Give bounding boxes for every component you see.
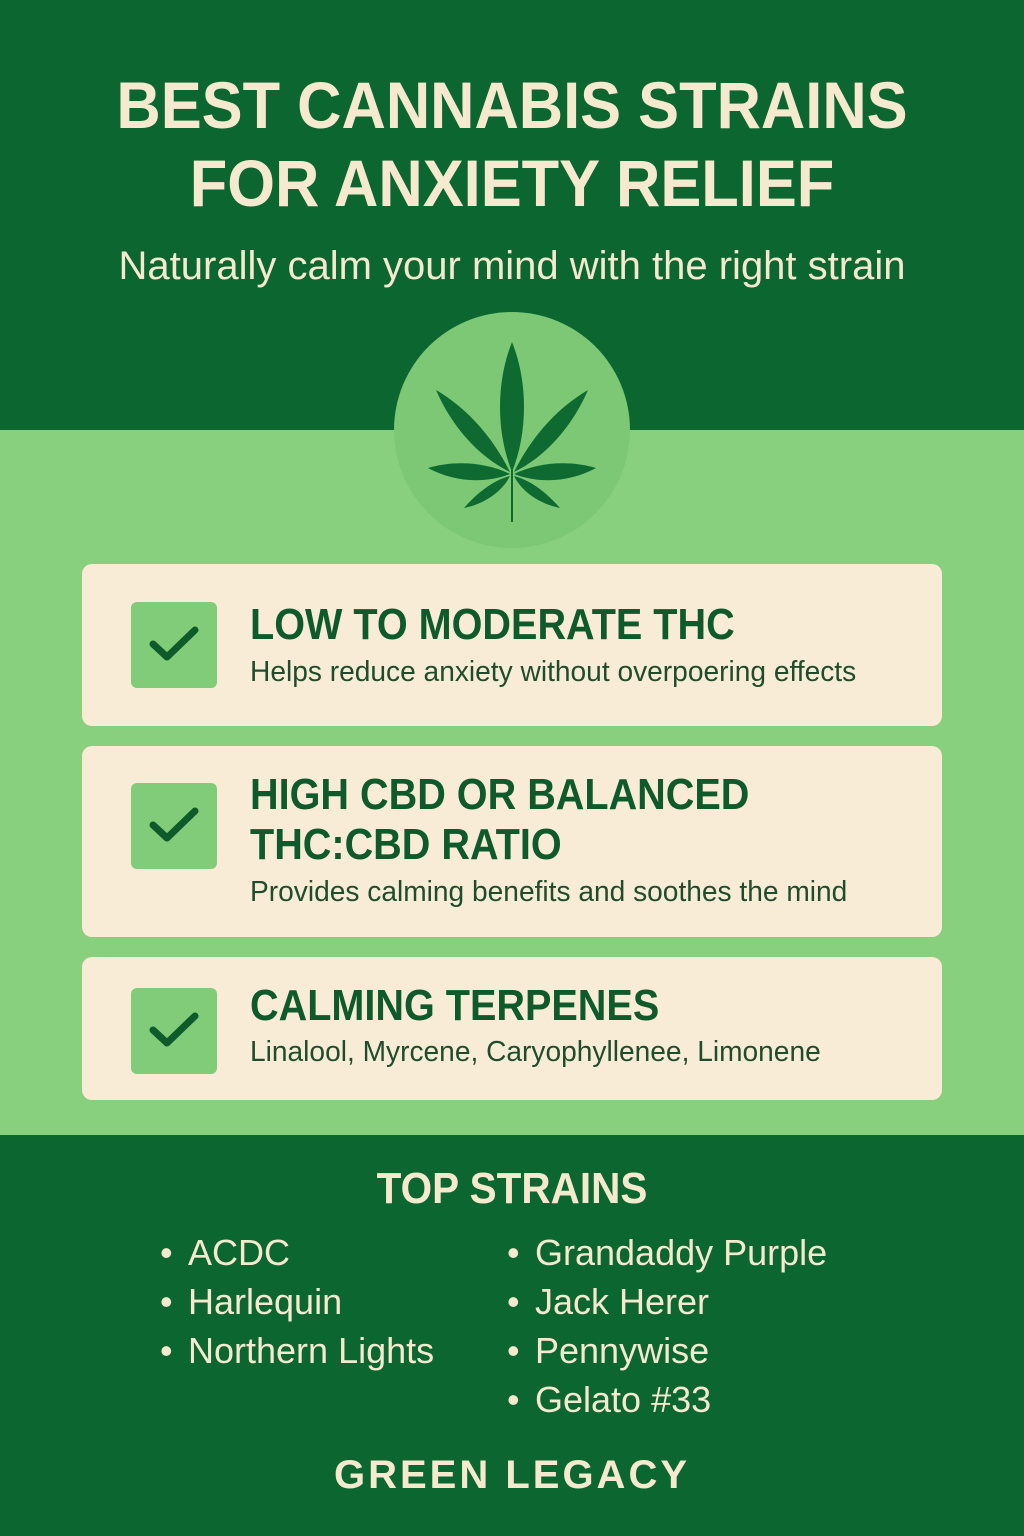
list: left column: • xyxy=(160,1330,173,1371)
description: Linalool, Myrcene, Caryophyllenee, Limonene xyxy=(250,1036,821,1068)
heading: LOW TO MODERATE THC xyxy=(250,600,735,649)
list: right column: • xyxy=(507,1379,520,1420)
list: right column: • xyxy=(507,1330,520,1371)
heading: HIGH CBD OR BALANCED xyxy=(250,770,749,819)
light green band xyxy=(0,430,1024,1135)
list: right column: Gelato #33 xyxy=(535,1379,711,1420)
card: low to moderate THC xyxy=(82,564,942,726)
description: Provides calming benefits and soothes the mind xyxy=(250,876,847,908)
list: right column: Pennywise xyxy=(535,1330,709,1371)
heading: THC:CBD RATIO xyxy=(250,820,562,869)
icon: checkbox xyxy=(131,988,217,1074)
brand footer: GREEN LEGACY xyxy=(334,1453,690,1497)
list: left column: • xyxy=(160,1232,173,1273)
heading xyxy=(250,770,749,869)
list: right column: • xyxy=(507,1232,520,1273)
card: high CBD xyxy=(82,746,942,937)
title: FOR ANXIETY RELIEF xyxy=(190,146,834,220)
list: left column: Northern Lights xyxy=(188,1330,434,1371)
list: right column: Grandaddy Purple xyxy=(535,1232,827,1273)
list: left column: • xyxy=(160,1281,173,1322)
heading: CALMING TERPENES xyxy=(250,981,659,1030)
icon: cannabis leaf xyxy=(394,312,630,548)
card: calming terpenes xyxy=(82,957,942,1100)
icon: checkbox xyxy=(131,602,217,688)
list: left column: ACDC xyxy=(188,1232,290,1273)
list: left column xyxy=(160,1232,434,1371)
list: right column: • xyxy=(507,1281,520,1322)
icon: checkbox xyxy=(131,783,217,869)
list: right column xyxy=(507,1232,827,1420)
heading: top strains: TOP STRAINS xyxy=(377,1164,647,1213)
list: left column: Harlequin xyxy=(188,1281,342,1322)
subtitle: Naturally calm your mind with the right strain xyxy=(119,244,905,288)
title xyxy=(116,68,908,220)
description: Helps reduce anxiety without overpoering effects xyxy=(250,656,856,688)
title: BEST CANNABIS STRAINS xyxy=(116,68,908,142)
list: right column: Jack Herer xyxy=(535,1281,709,1322)
